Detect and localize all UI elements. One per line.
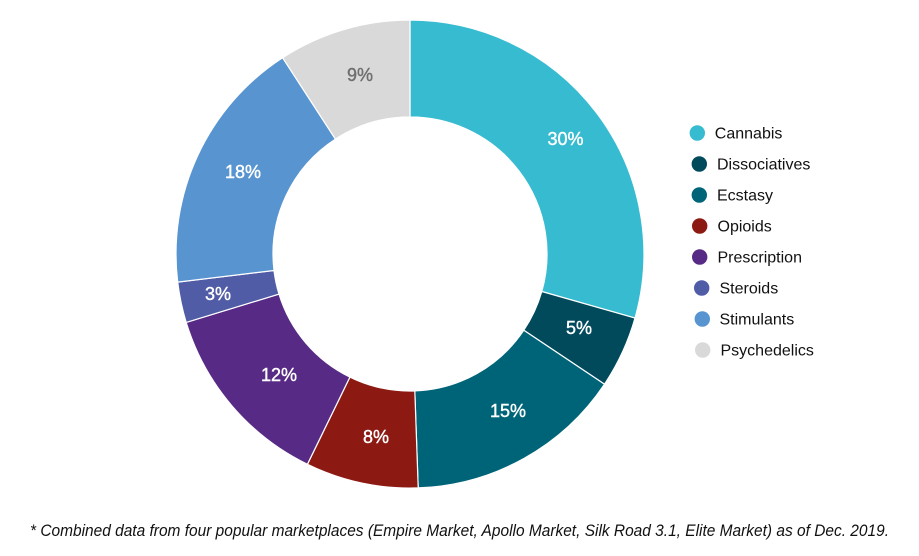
segment: Prescription 12%: [186, 294, 350, 464]
legend item: Ecstasy: Ecstasy: [717, 188, 773, 205]
legend item: Opioids: Opioids: [718, 219, 772, 236]
value: 30%: 30%: [547, 129, 584, 149]
value: 3%: 3%: [205, 284, 231, 304]
donut chart: [176, 20, 644, 488]
value: 15%: 15%: [490, 401, 526, 421]
legend item: Dissociatives: Dissociatives: [717, 157, 810, 174]
value: 12%: 12%: [261, 365, 297, 385]
legend item: Opioids: [692, 218, 772, 236]
value: 18%: 18%: [225, 162, 261, 182]
segment: Cannabis 30%: [410, 20, 644, 318]
legend item: Psychedelics: Psychedelics: [720, 343, 814, 360]
legend item: Ecstasy: [692, 187, 773, 205]
legend item: Cannabis: Cannabis: [715, 126, 782, 143]
segment: Psychedelics 9%: [283, 20, 410, 139]
donut value labels: [205, 65, 592, 447]
value: 5%: 5%: [566, 318, 592, 338]
segment: Ecstasy 15%: [415, 330, 604, 488]
segment: Opioids 8%: [307, 377, 418, 488]
legend item: Stimulants: Stimulants: [720, 312, 794, 329]
legend item: Prescription: Prescription: [718, 250, 802, 267]
segment: Steroids 3%: [178, 270, 279, 322]
value: 8%: 8%: [363, 427, 389, 447]
legend item: Steroids: Steroids: [720, 281, 778, 298]
legend: [690, 125, 814, 360]
segment: Dissociatives 5%: [524, 292, 635, 384]
value: 9%: 9%: [347, 65, 373, 85]
legend item: Steroids: [694, 280, 778, 298]
segment: Stimulants 18%: [176, 58, 335, 282]
